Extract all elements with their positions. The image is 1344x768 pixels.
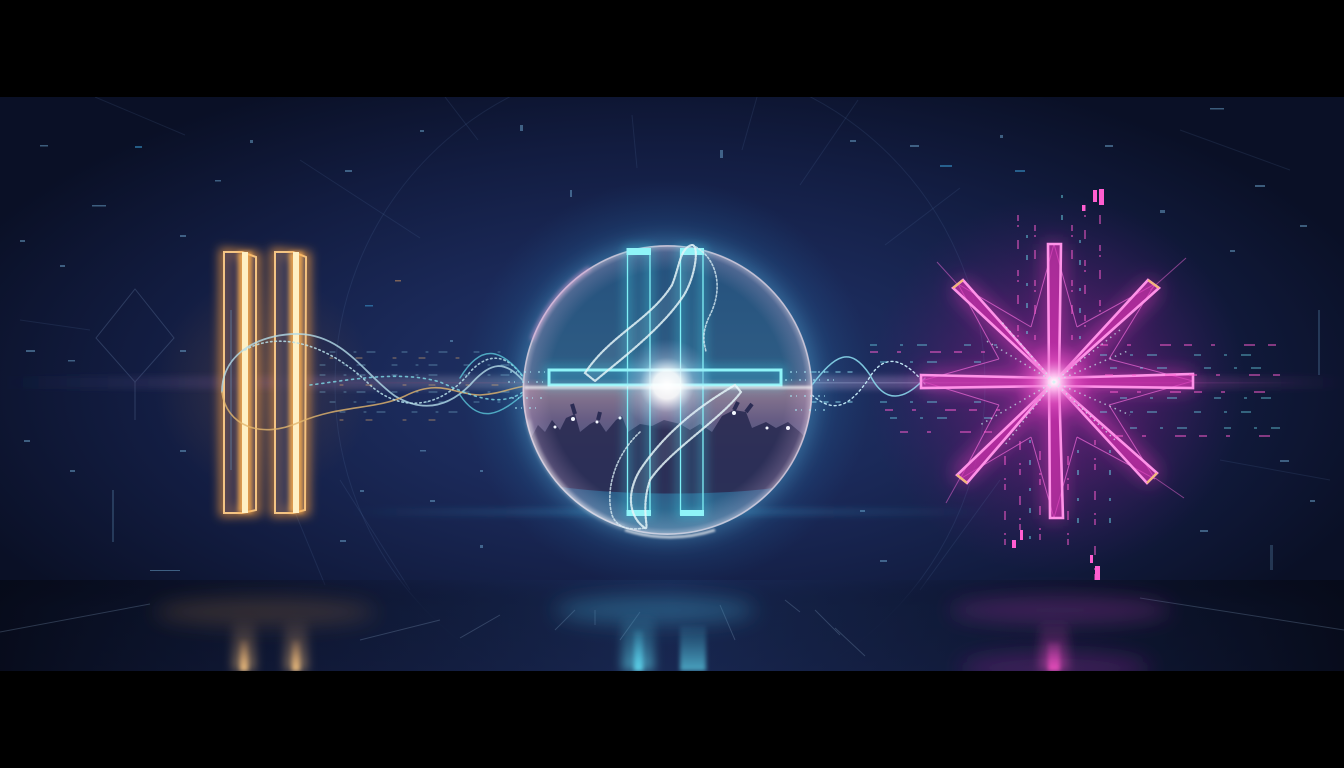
crowd silhouette: [530, 402, 808, 494]
magenta reflection: [950, 596, 1170, 684]
phone lights: [554, 411, 790, 430]
plus left vertical bar: [628, 251, 650, 514]
star particles: [20, 108, 1320, 571]
right bar: [275, 252, 306, 513]
burst horizontal pink streaks: [870, 345, 1280, 436]
blue horizon streak under sphere: [350, 508, 990, 516]
burst top and bottom clusters: [1012, 189, 1104, 580]
bright core: [524, 339, 812, 431]
cyan reflection: [555, 596, 755, 671]
burst centre speckle: [980, 320, 1130, 445]
scene panel: [0, 97, 1344, 671]
deep navy background: [0, 97, 1344, 671]
horizontal light beam: [0, 376, 1344, 389]
sphere edge particles: [508, 372, 835, 410]
icon: magenta eight-point star: [921, 244, 1193, 519]
wave entering from the pause bars: [222, 334, 526, 430]
plus horizontal bar: [549, 370, 781, 385]
star core: [1018, 347, 1090, 418]
fine radiating threads: [921, 244, 1193, 518]
faint concentric rings and rays: [20, 97, 1330, 592]
glass sphere: [518, 241, 816, 539]
burst vertical pink streaks: [1005, 190, 1100, 580]
star arms: [921, 244, 1193, 518]
amber reflection: [155, 598, 375, 671]
burst horizontal cyan streaks: [870, 345, 1280, 428]
helix ribbon through the plus: [585, 245, 741, 529]
plus bar caps: [626, 248, 704, 516]
burst vertical cyan streaks: [1027, 195, 1110, 540]
plus glow: [547, 249, 783, 515]
sphere body: [522, 245, 812, 535]
magenta and cyan particle burst: [870, 190, 1280, 580]
star glow: [921, 244, 1193, 519]
faint diamond outline icon: [96, 289, 174, 420]
bar glow: [224, 253, 306, 512]
icon: amber pause bars: [224, 252, 306, 513]
icon: cyan plus: [547, 248, 783, 516]
wave between sphere and star: [812, 357, 925, 406]
floor lines: [0, 598, 1344, 656]
left bar: [224, 252, 256, 513]
reflective floor: [0, 580, 1344, 684]
background halos: [180, 201, 1218, 568]
plus right vertical bar: [680, 251, 703, 514]
amber arm tips: [953, 280, 1159, 483]
sphere glow: [518, 241, 816, 539]
sphere rim highlight: [522, 245, 812, 535]
